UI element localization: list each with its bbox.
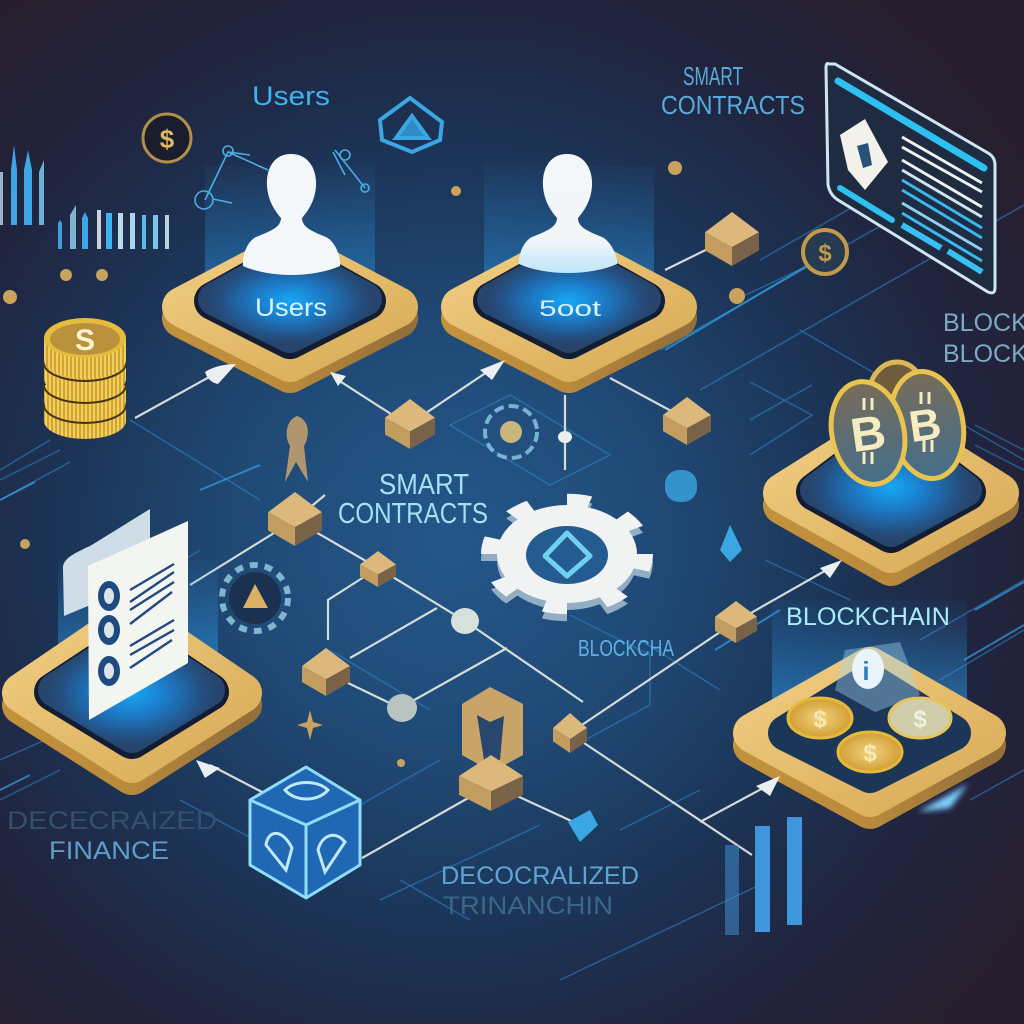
heading: decentralized finance left: FINANCE <box>49 837 169 865</box>
platform: bitcoin <box>783 362 999 566</box>
icon: scroll behind document <box>63 509 150 616</box>
heading: block block right <box>943 309 1024 368</box>
icon: node cubes <box>268 212 759 753</box>
platform: users <box>182 154 398 373</box>
label: users: Users <box>255 294 327 322</box>
icon: hologram badge: i <box>862 656 870 686</box>
connector lines <box>135 238 830 858</box>
icon: coin outline right: $ <box>818 240 832 267</box>
icon: coin right: $ <box>913 706 927 733</box>
icon: coin stack <box>44 318 126 439</box>
heading: smart contracts top: CONTRACTS <box>661 90 805 120</box>
icon: blue drop markers <box>568 470 742 842</box>
icon: bitcoin coins: B <box>906 399 944 452</box>
small gold markers <box>3 161 745 767</box>
heading: smart contracts center: SMART <box>379 469 469 501</box>
icon: coin center <box>838 732 902 772</box>
network icons near users <box>195 146 369 209</box>
icon: gold tower <box>459 687 523 811</box>
icon: user silhouette <box>519 154 617 273</box>
icon: shield top <box>380 98 442 152</box>
glow streak <box>918 784 968 812</box>
heading: smart contracts top: SMART <box>683 61 743 91</box>
arrow heads <box>196 360 842 796</box>
heading: decentralized finance left <box>7 807 217 865</box>
icon: hologram badge <box>835 642 920 712</box>
heading: blockchain: BLOCKCHAIN <box>786 603 950 631</box>
platform: 5oot <box>461 154 677 373</box>
circuit background lines <box>0 180 1024 980</box>
heading: blockcha: BLOCKCHA <box>578 635 674 661</box>
heading: smart contracts top <box>661 61 805 120</box>
icon: document checklist <box>88 521 188 720</box>
heading: decocralized bottom: DECOCRALIZED <box>441 862 639 890</box>
bottom right bar chart <box>725 817 802 935</box>
heading: smart contracts center: CONTRACTS <box>338 498 488 530</box>
icon: coin center: $ <box>863 740 877 767</box>
icon: bitcoin coins <box>822 362 972 491</box>
icon: center emblem <box>485 406 537 458</box>
beam behind user 1 <box>205 165 375 325</box>
beam behind document <box>58 560 218 670</box>
bright circuit lines <box>0 258 1024 790</box>
icon: coin outline right <box>803 230 847 274</box>
icon: bitcoin coins: B <box>847 406 889 463</box>
icon: coin left: $ <box>813 706 827 733</box>
icon: coin left <box>788 698 852 738</box>
heading: decentralized finance left: DECECRAIZED <box>7 807 217 835</box>
icon: user silhouette <box>243 154 340 275</box>
icon: gear <box>493 502 641 613</box>
heading: decocralized bottom: TRINANCHIN <box>443 892 613 920</box>
beam behind user 2 <box>484 165 654 325</box>
heading: decocralized bottom <box>441 862 639 920</box>
icon: blue cube <box>250 767 360 898</box>
label: 5oot: 5oot <box>539 296 601 321</box>
heading: smart contracts center <box>338 469 488 530</box>
icon: gold badge top left <box>143 114 191 162</box>
icon: gold badge top left: $ <box>160 124 175 154</box>
icon: gear badge left <box>222 565 288 631</box>
icon: smart contract panel <box>826 64 995 293</box>
beam behind blockchain coins <box>772 600 967 710</box>
icon: coin stack: S <box>75 324 95 357</box>
platform: coins <box>753 642 986 812</box>
icon: coin right <box>889 698 951 738</box>
platform: document <box>22 509 242 775</box>
heading: users: Users <box>252 81 330 111</box>
figure small gold <box>285 416 308 482</box>
left bar chart decoration <box>0 145 169 249</box>
